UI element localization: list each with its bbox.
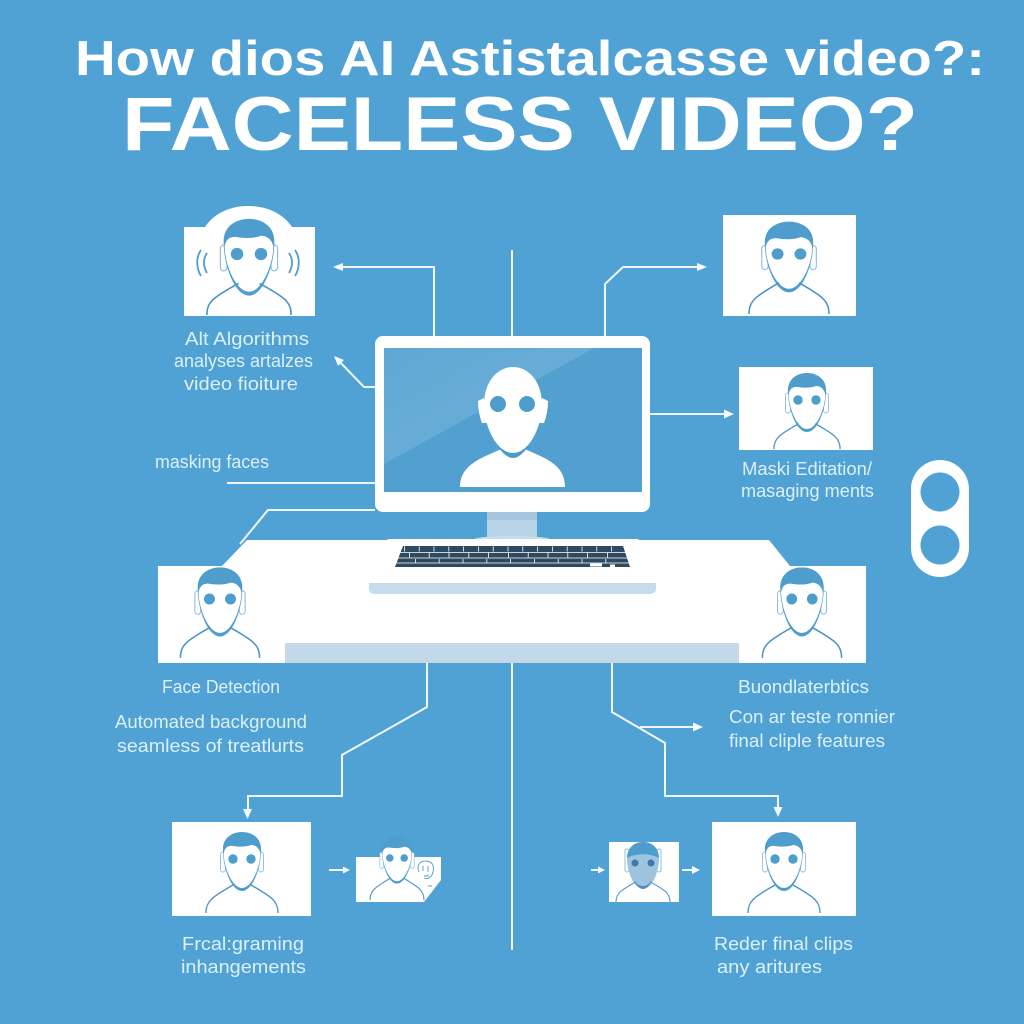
label: AI algorithms [174, 328, 313, 394]
label: face detection [115, 676, 307, 756]
desk front edge [285, 643, 739, 663]
panel: top-left video card [184, 206, 315, 316]
label: boundary features: Buondlaterbtics [738, 676, 869, 697]
label: framing enhancements: inhangements [181, 956, 306, 977]
panel: desk with side video cards [158, 540, 866, 663]
icon: sound waves [197, 250, 299, 276]
icon: faceless person [460, 367, 565, 487]
icon: left desk face [180, 567, 260, 658]
label: render final clips: any aritures [717, 956, 822, 977]
label: face detection: Automated background [115, 711, 307, 732]
monitor stand [475, 512, 549, 542]
label: AI algorithms: video fioiture [184, 373, 298, 394]
label: mask editation: masaging ments [741, 480, 874, 501]
monitor [375, 336, 650, 512]
panel: bottom-right video card [712, 822, 856, 916]
label: boundary features: final cliple features [729, 730, 885, 751]
title [75, 32, 985, 167]
label: AI algorithms: analyses artalzes [174, 350, 313, 371]
title: FACELESS VIDEO? [122, 82, 918, 167]
label: mask editation [741, 458, 874, 501]
panel: small masked card [609, 842, 679, 902]
label: AI algorithms: Alt Algorithms [185, 328, 309, 349]
label: framing enhancements: Frcal:graming [182, 933, 304, 954]
panel: small folded card [356, 836, 441, 902]
label: face detection: Face Detection [162, 676, 280, 697]
label: render final clips [714, 933, 853, 977]
screen [384, 348, 642, 492]
label: mask editation: Maski Editation/ [742, 458, 873, 479]
icon: small sketch [418, 861, 434, 886]
connector lines and arrows [227, 250, 782, 950]
label: framing enhancements [181, 933, 306, 977]
keyboard [369, 539, 656, 594]
panel: bottom-left video card [172, 822, 311, 916]
label: face detection: seamless of treatlurts [117, 735, 304, 756]
icon: two-circle pill [911, 460, 969, 577]
panel: right middle video card [739, 367, 873, 450]
panel: top-right video card [723, 215, 856, 316]
title: How dios AI Astistalcasse video?: [75, 32, 985, 86]
label: boundary features [729, 676, 895, 751]
label: masking faces: masking faces [155, 451, 269, 472]
label: render final clips: Reder final clips [714, 933, 853, 954]
icon: right desk face [762, 567, 842, 658]
label: boundary features: Con ar teste ronnier [729, 706, 895, 727]
